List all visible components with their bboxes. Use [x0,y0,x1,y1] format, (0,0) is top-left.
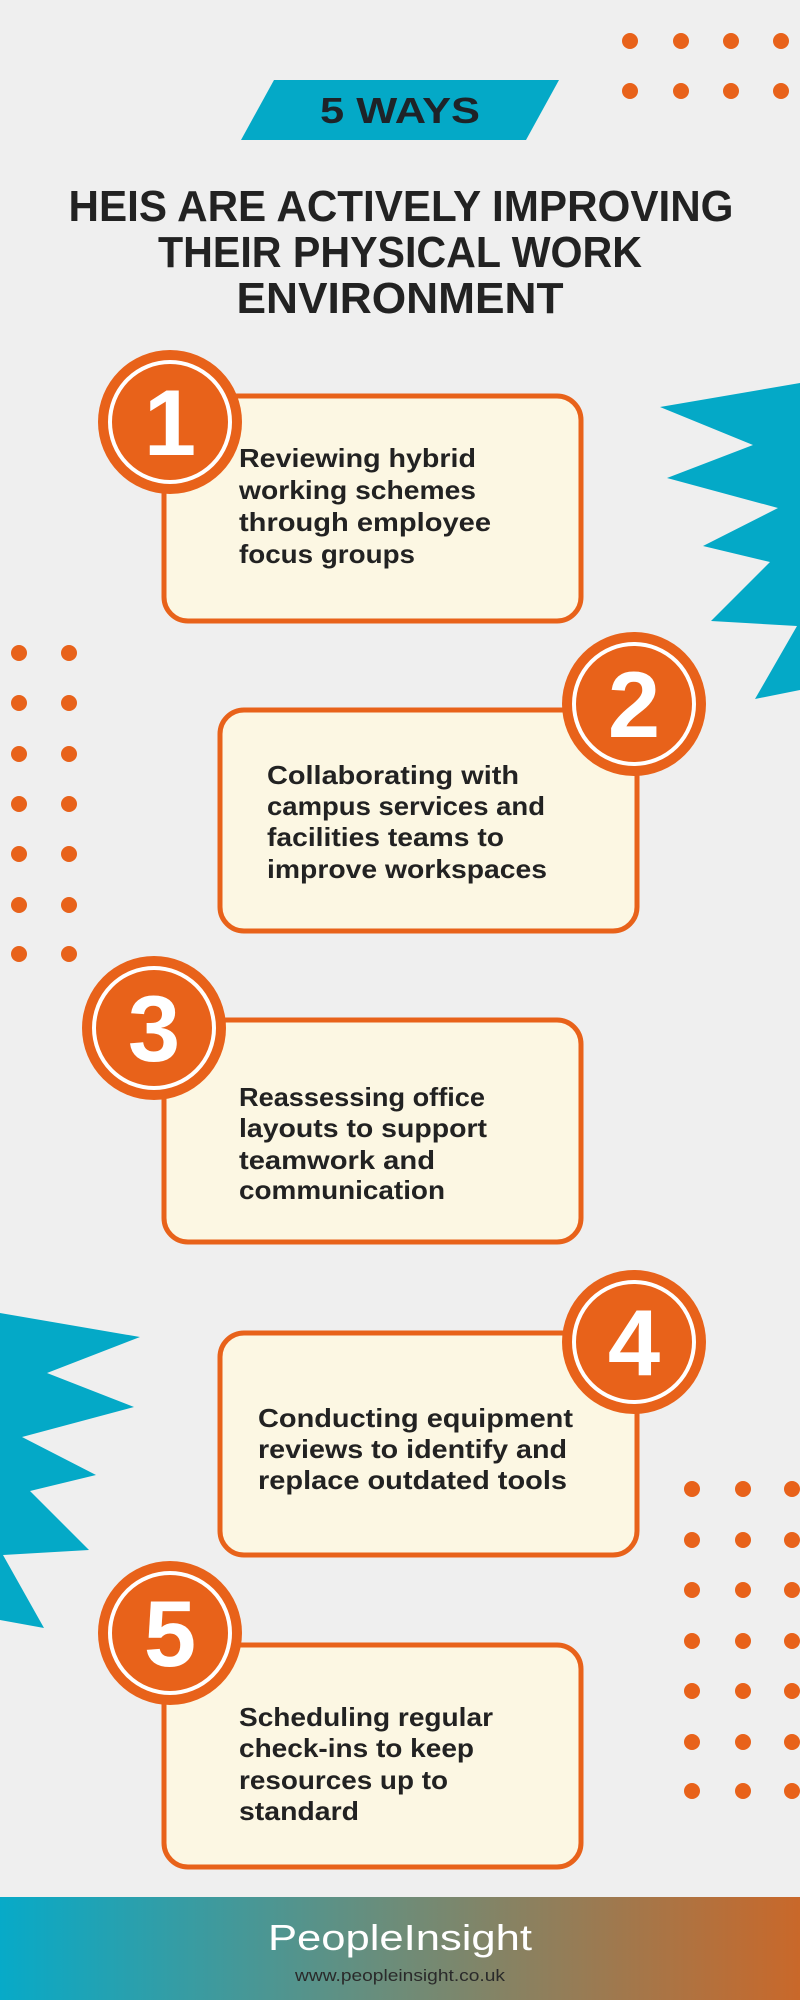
step 3: teamwork and [239,1145,435,1175]
step 3: 3 [128,976,180,1081]
title: HEIS ARE ACTIVELY IMPROVING [68,182,734,231]
url: www.peopleinsight.co.uk [294,1966,506,1985]
step 4: replace outdated tools [258,1465,567,1495]
step 1: through employee [239,507,491,537]
step 4: 4 [608,1290,660,1395]
logo: PeopleInsight [268,1917,532,1958]
step 5: standard [239,1796,359,1826]
footer [0,1897,800,2000]
dots: bottom right [684,1481,800,1799]
banner: 5 ways: 5 WAYS [320,90,480,131]
step 5: check-ins to keep [239,1733,474,1763]
step 5: 5 [144,1581,196,1686]
step 2: improve workspaces [267,854,547,884]
step 2: 2 [608,652,660,757]
step 4 [220,1270,706,1555]
step 2: Collaborating with [267,760,519,790]
step 1: focus groups [239,539,415,569]
step 3: layouts to support [239,1113,487,1143]
step 3: communication [239,1175,445,1205]
step 1: Reviewing hybrid [239,443,476,473]
step 5: resources up to [239,1765,448,1795]
step 2 [220,632,706,931]
step 4: Conducting equipment [258,1403,573,1433]
step 1 [98,350,581,621]
starburst: left [0,1313,140,1628]
step 3: Reassessing office [239,1082,485,1112]
step 2: campus services and [267,791,545,821]
step 4: reviews to identify and [258,1434,567,1464]
step 1: working schemes [238,475,476,505]
step 1: 1 [144,370,196,475]
dots: top right [622,33,789,99]
banner: 5 ways [241,80,559,140]
starburst: right [660,383,800,699]
dots: left [11,645,77,962]
title: ENVIRONMENT [236,274,564,323]
step 2: facilities teams to [267,822,504,852]
title: THEIR PHYSICAL WORK [158,228,642,277]
step 3 [82,956,581,1242]
step 5: Scheduling regular [239,1702,493,1732]
step 5 [98,1561,581,1867]
title [68,182,734,323]
